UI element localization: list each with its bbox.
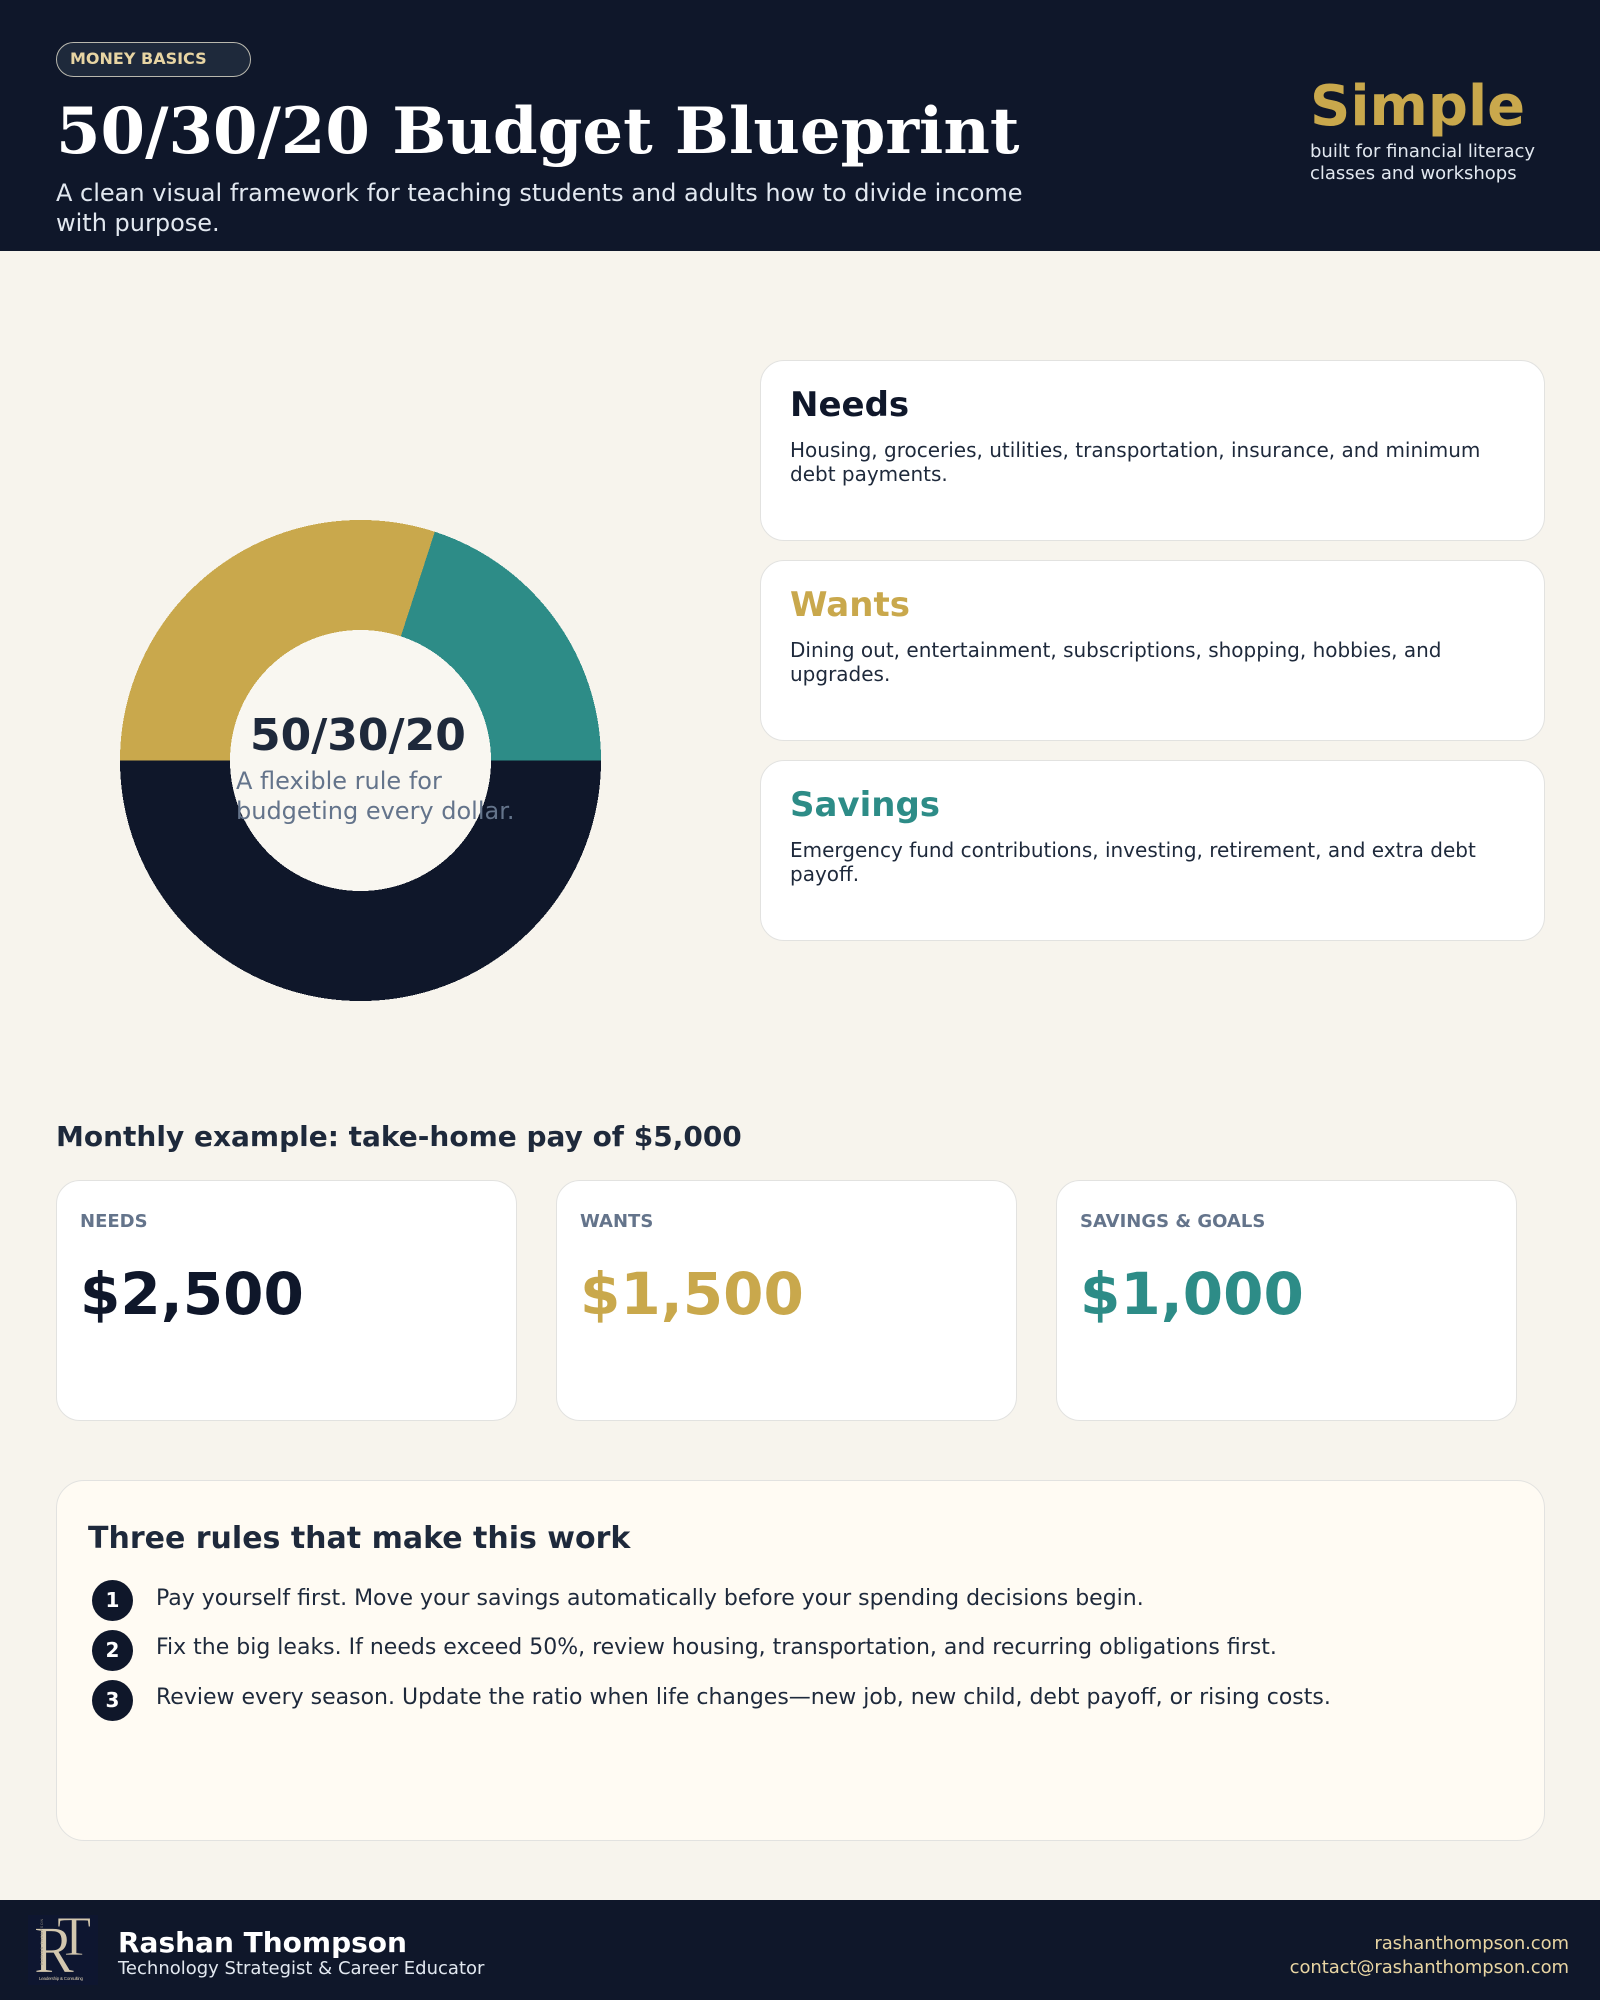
amount: $1,000 [1080,1260,1304,1328]
panel: savings amount [1056,1180,1517,1421]
rule 1 number: 1 [106,1588,119,1612]
description: wants: Dining out, entertainment, subscriptions, shopping, hobbies, and [790,638,1442,662]
description: needs [790,438,1480,486]
rule 3 text: Review every season. Update the ratio when life changes—new job, new child, debt payoff, or rising costs. [156,1685,1331,1710]
logo: RASHAN THOMPSON [40,1919,44,1965]
rule 2 number: 2 [106,1638,119,1662]
donut chart [120,520,601,1001]
description: needs: debt payments. [790,462,948,486]
title: 50/30/20 Budget Blueprint [56,94,1019,169]
stat caption: built for financial literacy [1310,141,1535,162]
label: SAVINGS & GOALS [1080,1211,1265,1232]
rule 1 text: Pay yourself first. Move your savings automatically before your spending decisions begin. [156,1586,1144,1611]
section heading: monthly example: Monthly example: take-home pay of $5,000 [56,1120,742,1153]
rules heading: Three rules that make this work [88,1521,630,1556]
subtitle: with purpose. [56,209,220,237]
panel: three rules [56,1480,1545,1841]
label: NEEDS [80,1211,148,1232]
donut caption [236,767,515,824]
header band [0,0,1600,251]
rule 2 number [92,1630,133,1671]
presenter name: Rashan Thompson [118,1926,407,1959]
contact details [1290,1933,1569,1978]
logo: Leadership & Consulting [39,1976,83,1981]
stat caption: classes and workshops [1310,163,1517,184]
badge: money basics [56,42,251,77]
panel: wants [760,560,1545,741]
heading: wants: Wants [790,585,910,625]
panel: needs amount [56,1180,517,1421]
donut title: 50/30/20 [250,710,466,761]
rule 2 text: Fix the big leaks. If needs exceed 50%, review housing, transportation, and recurring obligations first. [156,1635,1277,1660]
label: WANTS [580,1211,653,1232]
description: savings [790,838,1476,886]
badge: money basics: MONEY BASICS [70,49,207,68]
stat word: Simple [1310,74,1525,139]
description: savings: Emergency fund contributions, investing, retirement, and extra debt [790,838,1476,862]
stat: simple [1310,74,1535,184]
panel: wants amount [556,1180,1017,1421]
description: savings: payoff. [790,862,859,886]
amount: $2,500 [80,1260,304,1328]
subtitle: A clean visual framework for teaching students and adults how to divide income [56,179,1023,207]
rule 3 number: 3 [106,1688,119,1712]
footer band [0,1900,1600,2000]
contact details: contact@rashanthompson.com [1290,1957,1569,1978]
presenter role: Technology Strategist & Career Educator [118,1958,484,1979]
heading: savings: Savings [790,785,940,825]
description: wants: upgrades. [790,662,890,686]
donut caption: A flexible rule for [236,767,442,795]
rule 3 number [92,1680,133,1721]
contact details: rashanthompson.com [1374,1933,1569,1954]
donut caption: budgeting every dollar. [236,796,515,824]
description: wants [790,638,1442,686]
description: needs: Housing, groceries, utilities, transportation, insurance, and minimum [790,438,1480,462]
panel: needs [760,360,1545,541]
heading: needs: Needs [790,385,909,425]
rule 1 number [92,1580,133,1621]
stat caption [1310,141,1535,184]
panel: savings [760,760,1545,941]
subtitle [56,179,1023,237]
amount: $1,500 [580,1260,804,1328]
